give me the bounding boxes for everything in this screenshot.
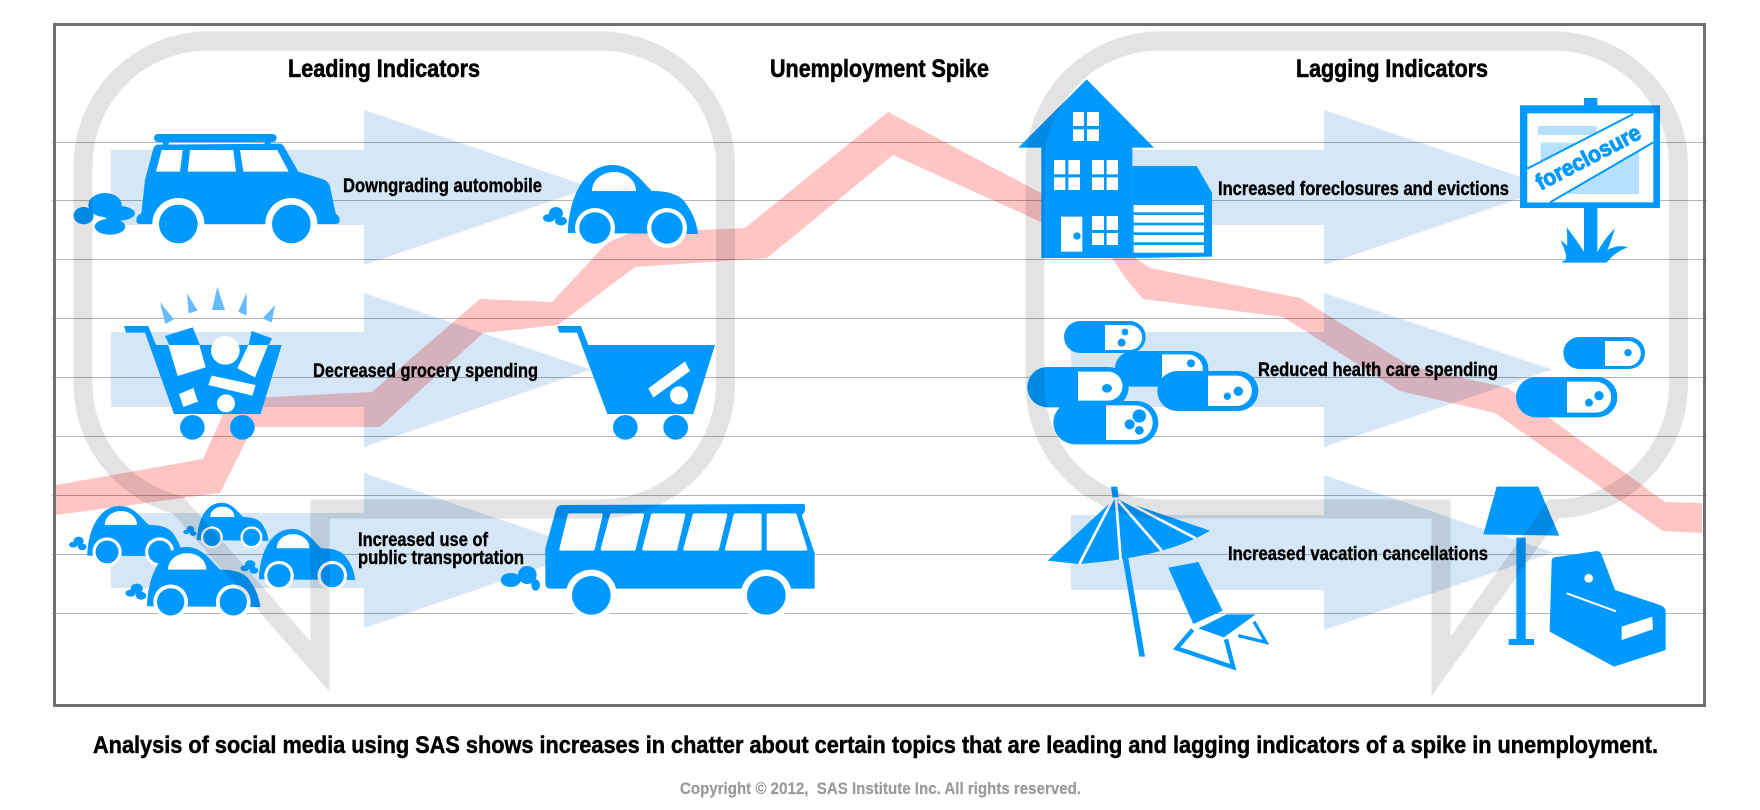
panel: leading indicators speech bubble: [83, 41, 726, 666]
chart: unemployment line: [56, 112, 1702, 533]
label: increased use of public transportation: public transportation: [358, 548, 524, 569]
label: increased use of public transportation: Increased use of: [358, 530, 489, 551]
icon: bus: [501, 504, 815, 621]
label: increased use of public transportation: [358, 530, 524, 569]
label: increased vacation cancellations: Increased vacation cancellations: [1228, 544, 1488, 565]
label: decreased grocery spending: Decreased grocery spending: [313, 361, 538, 382]
pill: top: [1064, 321, 1146, 353]
heading: leading indicators: Leading Indicators: [288, 55, 480, 83]
arrow: decreased grocery spending: [111, 293, 591, 447]
icon: small car: [543, 165, 698, 248]
arrow: downgrading automobile: [111, 110, 591, 265]
copyright: Copyright © 2012, SAS Institute Inc. All rights reserved.: [680, 780, 1081, 798]
label: downgrading automobile: Downgrading automobile: [343, 176, 542, 197]
icon: large SUV: [74, 134, 340, 250]
icon: traffic of cars: [69, 503, 355, 619]
icon: full shopping cart: [124, 287, 282, 440]
pill: middle back: [1115, 351, 1208, 387]
label: increased foreclosures and evictions: Increased foreclosures and evictions: [1218, 179, 1509, 200]
pill: bottom: [1053, 401, 1158, 444]
icon: two pills: [1516, 337, 1645, 417]
icon: foreclosure sign: [1520, 98, 1660, 263]
arrow: foreclosures: [1071, 110, 1552, 265]
pill: left: [1027, 367, 1129, 407]
icon: house: [1018, 79, 1212, 258]
icon: empty shopping cart: [557, 326, 715, 440]
pill: right: [1157, 371, 1258, 411]
icon: pills group: [1027, 321, 1258, 444]
heading: lagging indicators: Lagging Indicators: [1296, 55, 1488, 83]
icon: lamp and armchair: [1483, 487, 1666, 667]
arrow: vacation cancellations: [1071, 475, 1553, 630]
heading: unemployment spike: Unemployment Spike: [770, 55, 989, 83]
icon: beach umbrella and chair: [1048, 487, 1266, 667]
panel: background arrows: [111, 110, 1553, 630]
chart frame: [54, 24, 1704, 706]
panel: lagging indicators speech bubble: [1035, 41, 1678, 666]
label: reduced health care spending: Reduced health care spending: [1258, 360, 1498, 381]
arrow: health care: [1071, 293, 1552, 447]
icon: foreclosure sign: foreclosure: [1531, 119, 1645, 195]
arrow: public transportation: [111, 473, 591, 628]
